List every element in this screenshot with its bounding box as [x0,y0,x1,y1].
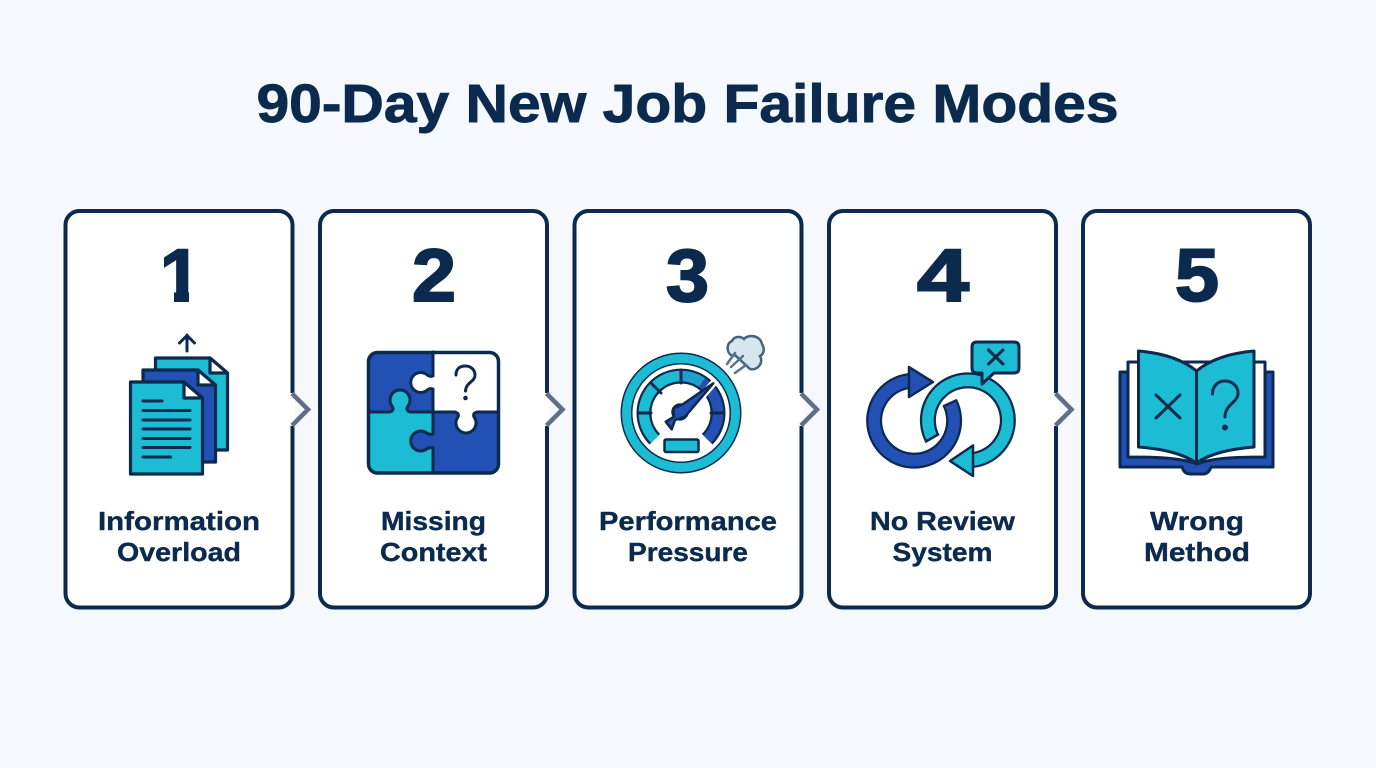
label: Missing [381,506,486,536]
label [870,506,1016,567]
panel: card 3 performance pressure [574,211,802,608]
icon: open book with x and question mark [1120,351,1273,474]
icon: stack of documents [130,335,228,474]
arrow 4 to 5 [1053,393,1072,426]
label [1144,506,1250,567]
number 4: 4 [917,234,969,317]
label: Overload [117,537,241,567]
icon: speedometer with steam [626,336,764,468]
number 2: 2 [412,234,456,317]
icon: broken loops with x bubble [874,342,1019,476]
label: Wrong [1150,506,1244,536]
icon: puzzle with missing piece [368,352,498,473]
label: Pressure [628,537,748,567]
label: System [892,537,992,567]
number 3: 3 [666,234,709,317]
label: Context [380,537,487,567]
arrow 2 to 3 [544,393,562,426]
label: No Review [870,506,1016,536]
label: Performance [599,506,777,536]
title: 90-Day New Job Failure Modes [256,74,1118,134]
number 5: 5 [1175,234,1219,317]
label [98,506,260,567]
panel: card 5 wrong method [1083,211,1310,608]
arrow 1 to 2 [289,393,308,426]
panel: card 1 information overload [66,211,292,608]
panel: card 2 missing context [320,211,547,608]
number 1: 1 [160,234,201,317]
label [380,506,487,567]
label [599,506,777,567]
panel: card 4 no review system [829,211,1056,608]
label: Method [1144,537,1250,567]
arrow 3 to 4 [798,393,817,426]
label: Information [98,506,260,536]
